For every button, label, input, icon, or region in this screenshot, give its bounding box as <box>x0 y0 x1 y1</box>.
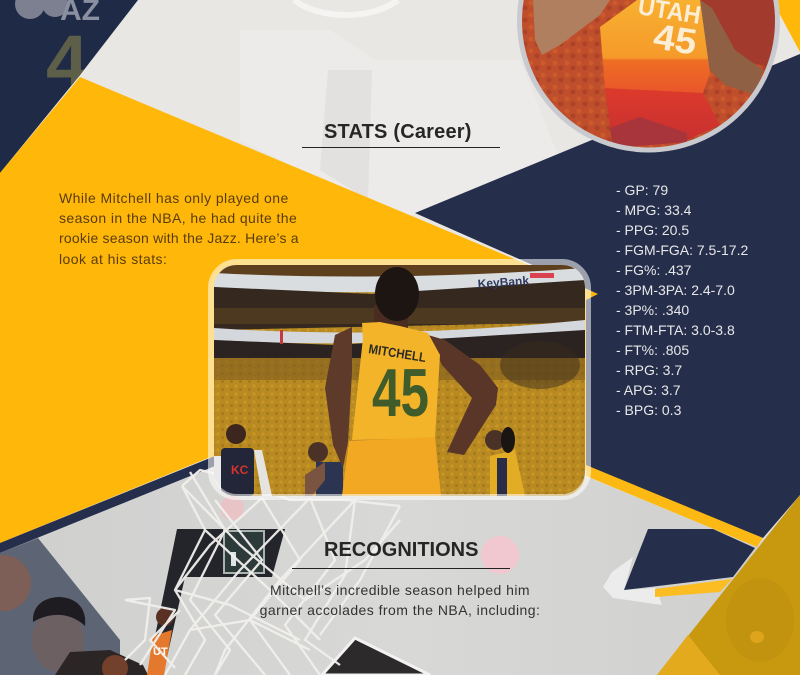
recognitions heading: RECOGNITIONS <box>324 539 478 561</box>
Mitchell neck <box>374 305 408 328</box>
shorts <box>605 88 720 140</box>
top left navy shape <box>0 0 138 173</box>
white smear <box>603 557 662 605</box>
stats list: - GP: 79 <box>616 182 668 198</box>
stats list: - FTM-FTA: 3.0-3.8 <box>616 322 735 338</box>
top arc <box>294 0 398 15</box>
Mitchell jersey <box>352 322 440 440</box>
lower right gold shape <box>657 495 800 675</box>
circle frame <box>520 0 778 150</box>
KC player: KC <box>231 463 249 477</box>
pink blurs <box>481 536 519 574</box>
basketball net <box>125 470 400 675</box>
stats list: - PPG: 20.5 <box>616 222 689 238</box>
recognitions text: garner accolades from the NBA, including: <box>260 602 540 618</box>
top left navy shape: 4 <box>46 20 88 105</box>
intro text: While Mitchell has only played one <box>59 190 289 206</box>
stats list: - FT%: .805 <box>616 342 689 358</box>
recognitions text <box>260 582 540 618</box>
player photo <box>212 265 585 496</box>
stats list: - MPG: 33.4 <box>616 202 691 218</box>
circular photo <box>522 0 775 148</box>
stats list: - RPG: 3.7 <box>616 362 682 378</box>
KC player <box>221 424 272 496</box>
collage photo panel <box>147 529 285 675</box>
small yellow stripe <box>655 579 732 597</box>
intro text: season in the NBA, he had quite the <box>59 210 297 226</box>
Mitchell arms <box>325 327 352 468</box>
Mitchell head <box>375 267 419 321</box>
navy right shape <box>415 54 800 538</box>
lower left grey panel <box>0 538 148 675</box>
intro text <box>59 190 299 267</box>
arena <box>214 265 585 496</box>
faded jersey figure <box>240 30 560 220</box>
Mitchell shorts <box>342 437 441 496</box>
left arm <box>533 0 610 55</box>
third player <box>485 427 525 496</box>
stats list: - FG%: .437 <box>616 262 691 278</box>
stats list: - FGM-FGA: 7.5-17.2 <box>616 242 748 258</box>
stats list: - APG: 3.7 <box>616 382 681 398</box>
top right yellow <box>772 0 800 52</box>
stats list <box>616 182 748 418</box>
right arm <box>700 0 763 95</box>
referee <box>214 456 226 494</box>
jersey 45: 45 <box>651 15 700 63</box>
yellow main shape <box>0 77 598 543</box>
jersey number: 45 <box>372 355 429 431</box>
banner text: KeyBank <box>477 273 530 291</box>
stats list: - 3PM-3PA: 2.4-7.0 <box>616 282 735 298</box>
intro text: rookie season with the Jazz. Here’s a <box>59 230 299 246</box>
collage photo panel: UT <box>153 646 168 658</box>
recognitions text: Mitchell’s incredible season helped him <box>270 582 530 598</box>
bottom centre photo <box>322 638 430 675</box>
second player <box>305 442 343 496</box>
lower yellow stripe <box>586 465 763 547</box>
intro text: look at his stats: <box>59 251 167 267</box>
player photo frame <box>211 262 588 497</box>
jersey name: MITCHELL <box>368 341 427 365</box>
stats list: - BPG: 0.3 <box>616 402 681 418</box>
stats heading: STATS (Career) <box>324 121 472 143</box>
lower grey area <box>0 467 800 675</box>
navy strip <box>0 456 215 553</box>
stats list: - 3P%: .340 <box>616 302 689 318</box>
jersey <box>600 0 710 93</box>
small navy shape <box>624 529 755 590</box>
